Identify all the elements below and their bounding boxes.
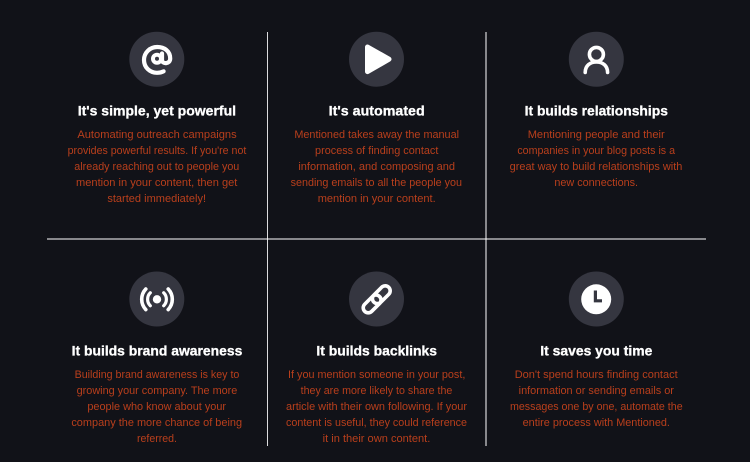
text block: entire process with Mentioned. xyxy=(523,417,670,429)
text block: Building brand awareness is key to xyxy=(75,369,239,381)
text block: started immediately! xyxy=(107,193,206,205)
text block xyxy=(291,129,462,205)
text block xyxy=(286,369,467,445)
panel: It builds relationships xyxy=(510,32,682,189)
text block: messages one by one, automate the xyxy=(510,401,683,413)
icon: chain link xyxy=(349,272,404,326)
text block: mention in your content, then get xyxy=(76,177,238,189)
heading: It builds relationships xyxy=(525,102,668,118)
heading: It's automated xyxy=(329,102,425,118)
text block: provides powerful results. If you're not xyxy=(68,145,247,157)
text block: they are more likely to share the xyxy=(301,385,452,397)
heading: It builds backlinks xyxy=(316,342,437,358)
text block: content is useful, they could reference xyxy=(286,417,467,429)
panel: It builds brand awareness xyxy=(71,272,243,445)
text block xyxy=(71,369,242,445)
text block: already reaching out to people you xyxy=(74,161,239,173)
text block: companies in your blog posts is a xyxy=(517,145,676,157)
icon: person xyxy=(569,32,624,87)
text block: people who know about your xyxy=(87,401,226,413)
text block: Mentioning people and their xyxy=(528,129,665,141)
panel: It builds backlinks xyxy=(286,272,467,445)
panel: It's simple, yet powerful xyxy=(68,32,247,205)
text block xyxy=(510,369,683,429)
text block xyxy=(68,129,247,205)
text block xyxy=(510,129,682,189)
icon: broadcast xyxy=(129,272,184,326)
heading: It's simple, yet powerful xyxy=(78,102,236,118)
icon: at sign xyxy=(129,32,184,87)
text block: referred. xyxy=(137,433,177,445)
text block: information, and composing and xyxy=(298,161,455,173)
text block: Mentioned takes away the manual xyxy=(294,129,459,141)
heading: It saves you time xyxy=(540,342,653,358)
text block: process of finding contact xyxy=(315,145,439,157)
panel: It's automated xyxy=(291,32,462,205)
text block: company the more chance of being xyxy=(71,417,242,429)
text block: article with their own following. If your xyxy=(286,401,467,413)
icon: clock xyxy=(569,272,624,326)
text block: sending emails to all the people you xyxy=(291,177,462,189)
text block: If you mention someone in your post, xyxy=(288,369,465,381)
heading: It builds brand awareness xyxy=(72,342,243,358)
icon: play xyxy=(349,32,404,87)
text block: Automating outreach campaigns xyxy=(77,129,237,141)
panel: It saves you time xyxy=(510,272,683,429)
text block: mention in your content. xyxy=(318,193,436,205)
text block: growing your company. The more xyxy=(77,385,237,397)
text block: great way to build relationships with xyxy=(510,161,682,173)
text block: information or sending emails or xyxy=(519,385,674,397)
text block: it in their own content. xyxy=(323,433,430,445)
text block: new connections. xyxy=(554,177,638,189)
text block: Don't spend hours finding contact xyxy=(515,369,679,381)
